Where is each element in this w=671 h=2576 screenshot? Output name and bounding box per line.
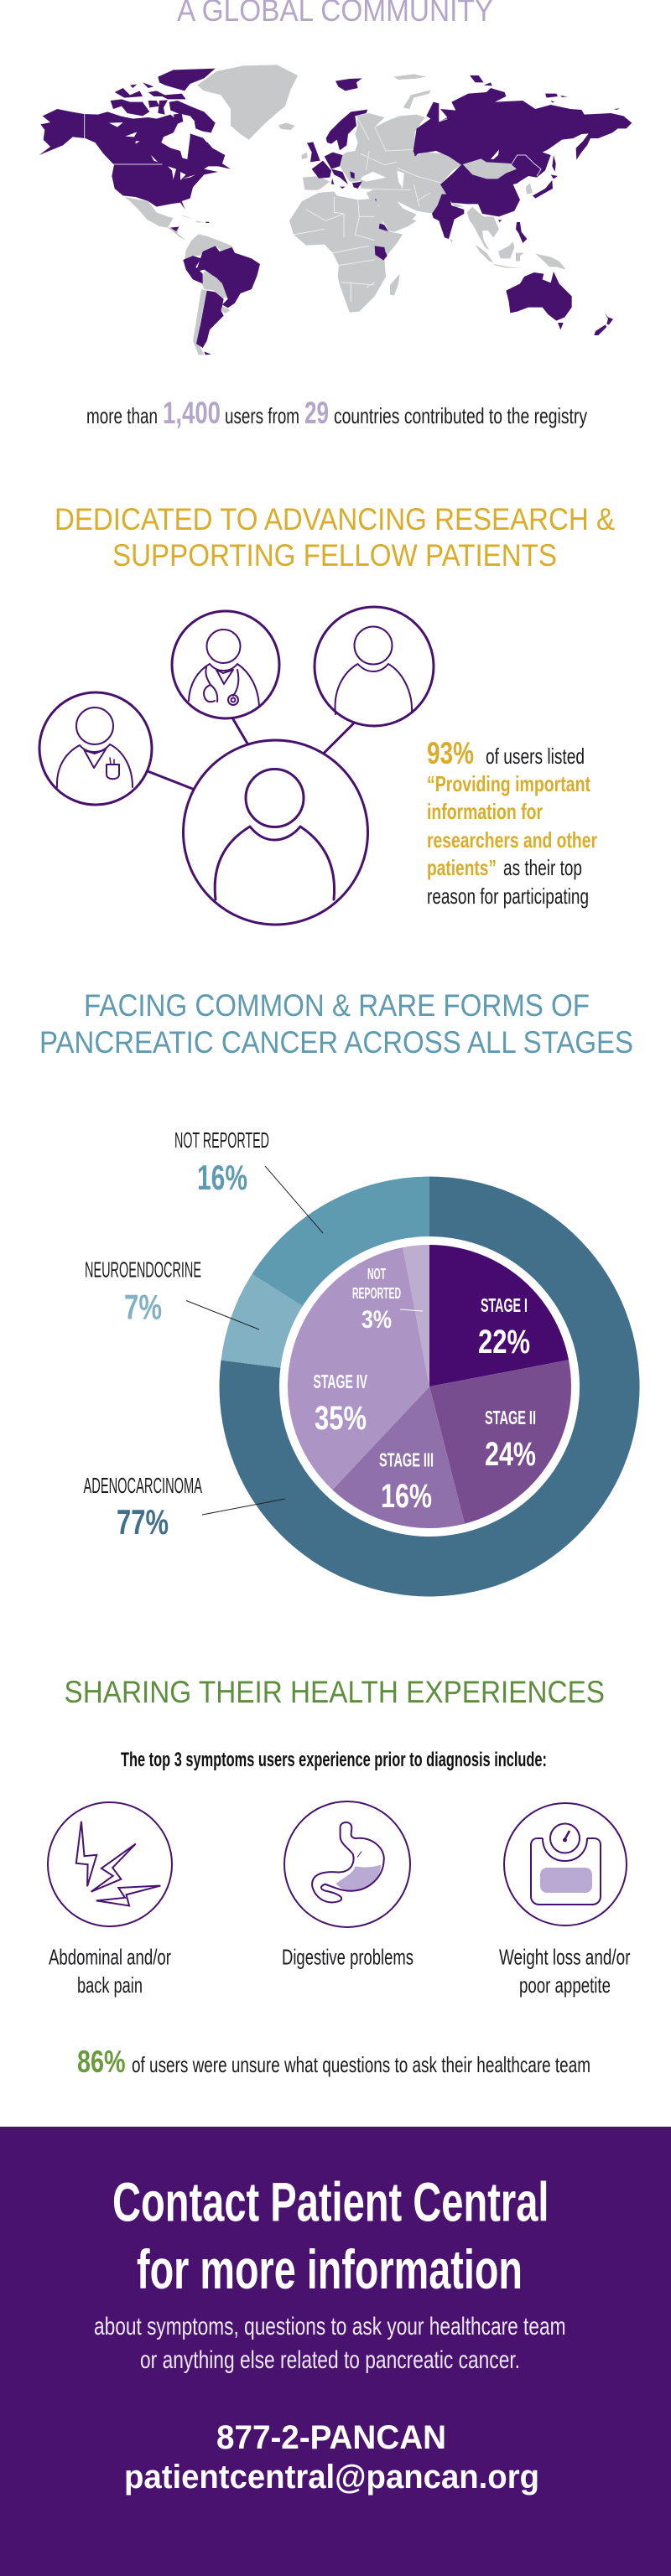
map: Russia, China, Japan	[414, 75, 632, 216]
pie labels: REPORTED	[352, 1285, 401, 1302]
footer heading	[112, 2171, 549, 2300]
stat line: users and countries	[86, 396, 587, 430]
footer description	[94, 2313, 565, 2374]
heading: facing common and rare forms: FACING COMMON & RARE FORMS OF	[84, 988, 590, 1023]
label: abdominal and back pain: Abdominal and/or	[49, 1945, 171, 1970]
stat text: 93 percent of users: researchers and other	[427, 827, 597, 853]
icon: stomach	[284, 1801, 410, 1927]
pie labels: STAGE IV	[314, 1371, 367, 1392]
label: abdominal and back pain	[49, 1945, 171, 1998]
pie labels: 3%	[362, 1306, 392, 1334]
pie labels: 35%	[315, 1400, 367, 1437]
icon: weight scale	[504, 1803, 627, 1926]
footer heading: for more information	[137, 2238, 523, 2300]
heading: facing common and rare forms	[39, 988, 633, 1060]
pie labels: STAGE I	[481, 1294, 528, 1316]
icon: pain lightning bolts	[48, 1802, 172, 1926]
stat text: 93 percent of users: 93%	[427, 736, 474, 770]
footer panel: contact patient central	[0, 2127, 671, 2576]
stat line: users and countries: 1,400	[163, 396, 221, 430]
stat text: 93 percent of users: of users listed	[486, 744, 585, 769]
stat text: 93 percent of users: information for	[427, 799, 543, 824]
footer contact details	[124, 2419, 539, 2496]
heading: dedicated to advancing research: DEDICATED TO ADVANCING RESEARCH &	[55, 502, 615, 536]
stat line: users and countries: users from	[225, 403, 299, 428]
pie labels: 16%	[381, 1478, 432, 1515]
white separator ring	[279, 1236, 580, 1537]
heading: sharing their health experiences: SHARING THEIR HEALTH EXPERIENCES	[64, 1675, 605, 1709]
outer ring: cancer type	[220, 1177, 640, 1596]
icon: doctor with stethoscope	[172, 611, 279, 718]
callout: not reported 16 percent	[174, 1127, 323, 1233]
heading: dedicated to advancing research: SUPPORTING FELLOW PATIENTS	[112, 538, 557, 573]
icon: person at top right	[315, 607, 434, 726]
stat line: users and countries: 29	[304, 396, 329, 430]
map: Africa, Middle East, India and Southeast Asia	[289, 191, 527, 313]
map: Central and South America	[124, 197, 260, 355]
callout: not reported 16 percent: 16%	[197, 1158, 247, 1197]
stat text: 93 percent of users: “Providing important	[427, 771, 590, 796]
footer description: or anything else related to pancreatic cancer.	[140, 2346, 520, 2374]
stat line: users and countries: countries contributed to the registry	[334, 403, 587, 428]
callout: adenocarcinoma 77 percent	[84, 1473, 285, 1542]
map: North America and Greenland	[39, 65, 298, 210]
footer contact details: 877-2-PANCAN	[216, 2419, 446, 2456]
label: weight loss and poor appetite: poor appetite	[519, 1972, 611, 1998]
world map	[39, 65, 632, 355]
pie labels: STAGE III	[379, 1449, 434, 1470]
callout: neuroendocrine 7 percent: NEUROENDOCRINE	[85, 1257, 201, 1283]
icon: person with coffee cup pocket	[39, 692, 152, 805]
heading: dedicated to advancing research	[55, 502, 615, 573]
pie labels	[314, 1266, 536, 1515]
stat text: 93 percent of users: reason for participating	[427, 884, 589, 909]
pie labels: NOT	[367, 1266, 386, 1283]
callout: adenocarcinoma 77 percent: ADENOCARCINOMA	[84, 1473, 202, 1498]
stat text: 93 percent of users	[427, 736, 597, 909]
footer contact details: patientcentral@pancan.org	[124, 2459, 539, 2496]
stat text: 93 percent of users: as their top	[503, 855, 582, 880]
pie labels: 22%	[478, 1324, 530, 1361]
connector lines	[148, 719, 353, 789]
label: digestive problems: Digestive problems	[282, 1945, 414, 1970]
stat line: users and countries: more than	[86, 403, 158, 428]
label: weight loss and poor appetite	[499, 1945, 631, 1998]
map: Indonesia and Oceania	[476, 241, 613, 335]
map: Europe and western Asia	[278, 74, 463, 232]
stat line: 86 percent of users: 86%	[77, 2045, 126, 2079]
stat line: 86 percent of users	[77, 2045, 590, 2079]
pie labels: 24%	[485, 1436, 536, 1473]
stat text: 93 percent of users: patients”	[427, 855, 497, 880]
icon: central patient	[183, 740, 367, 925]
callout: neuroendocrine 7 percent: 7%	[124, 1288, 162, 1326]
pie labels: STAGE II	[485, 1407, 536, 1428]
callout: neuroendocrine 7 percent	[85, 1257, 259, 1329]
callout: adenocarcinoma 77 percent: 77%	[117, 1502, 169, 1542]
network of people illustration	[39, 607, 434, 925]
inner pie: stage	[288, 1245, 571, 1528]
label: abdominal and back pain: back pain	[77, 1972, 143, 1998]
donut chart: cancer type and stage	[220, 1177, 640, 1596]
callout: not reported 16 percent: NOT REPORTED	[174, 1127, 269, 1153]
